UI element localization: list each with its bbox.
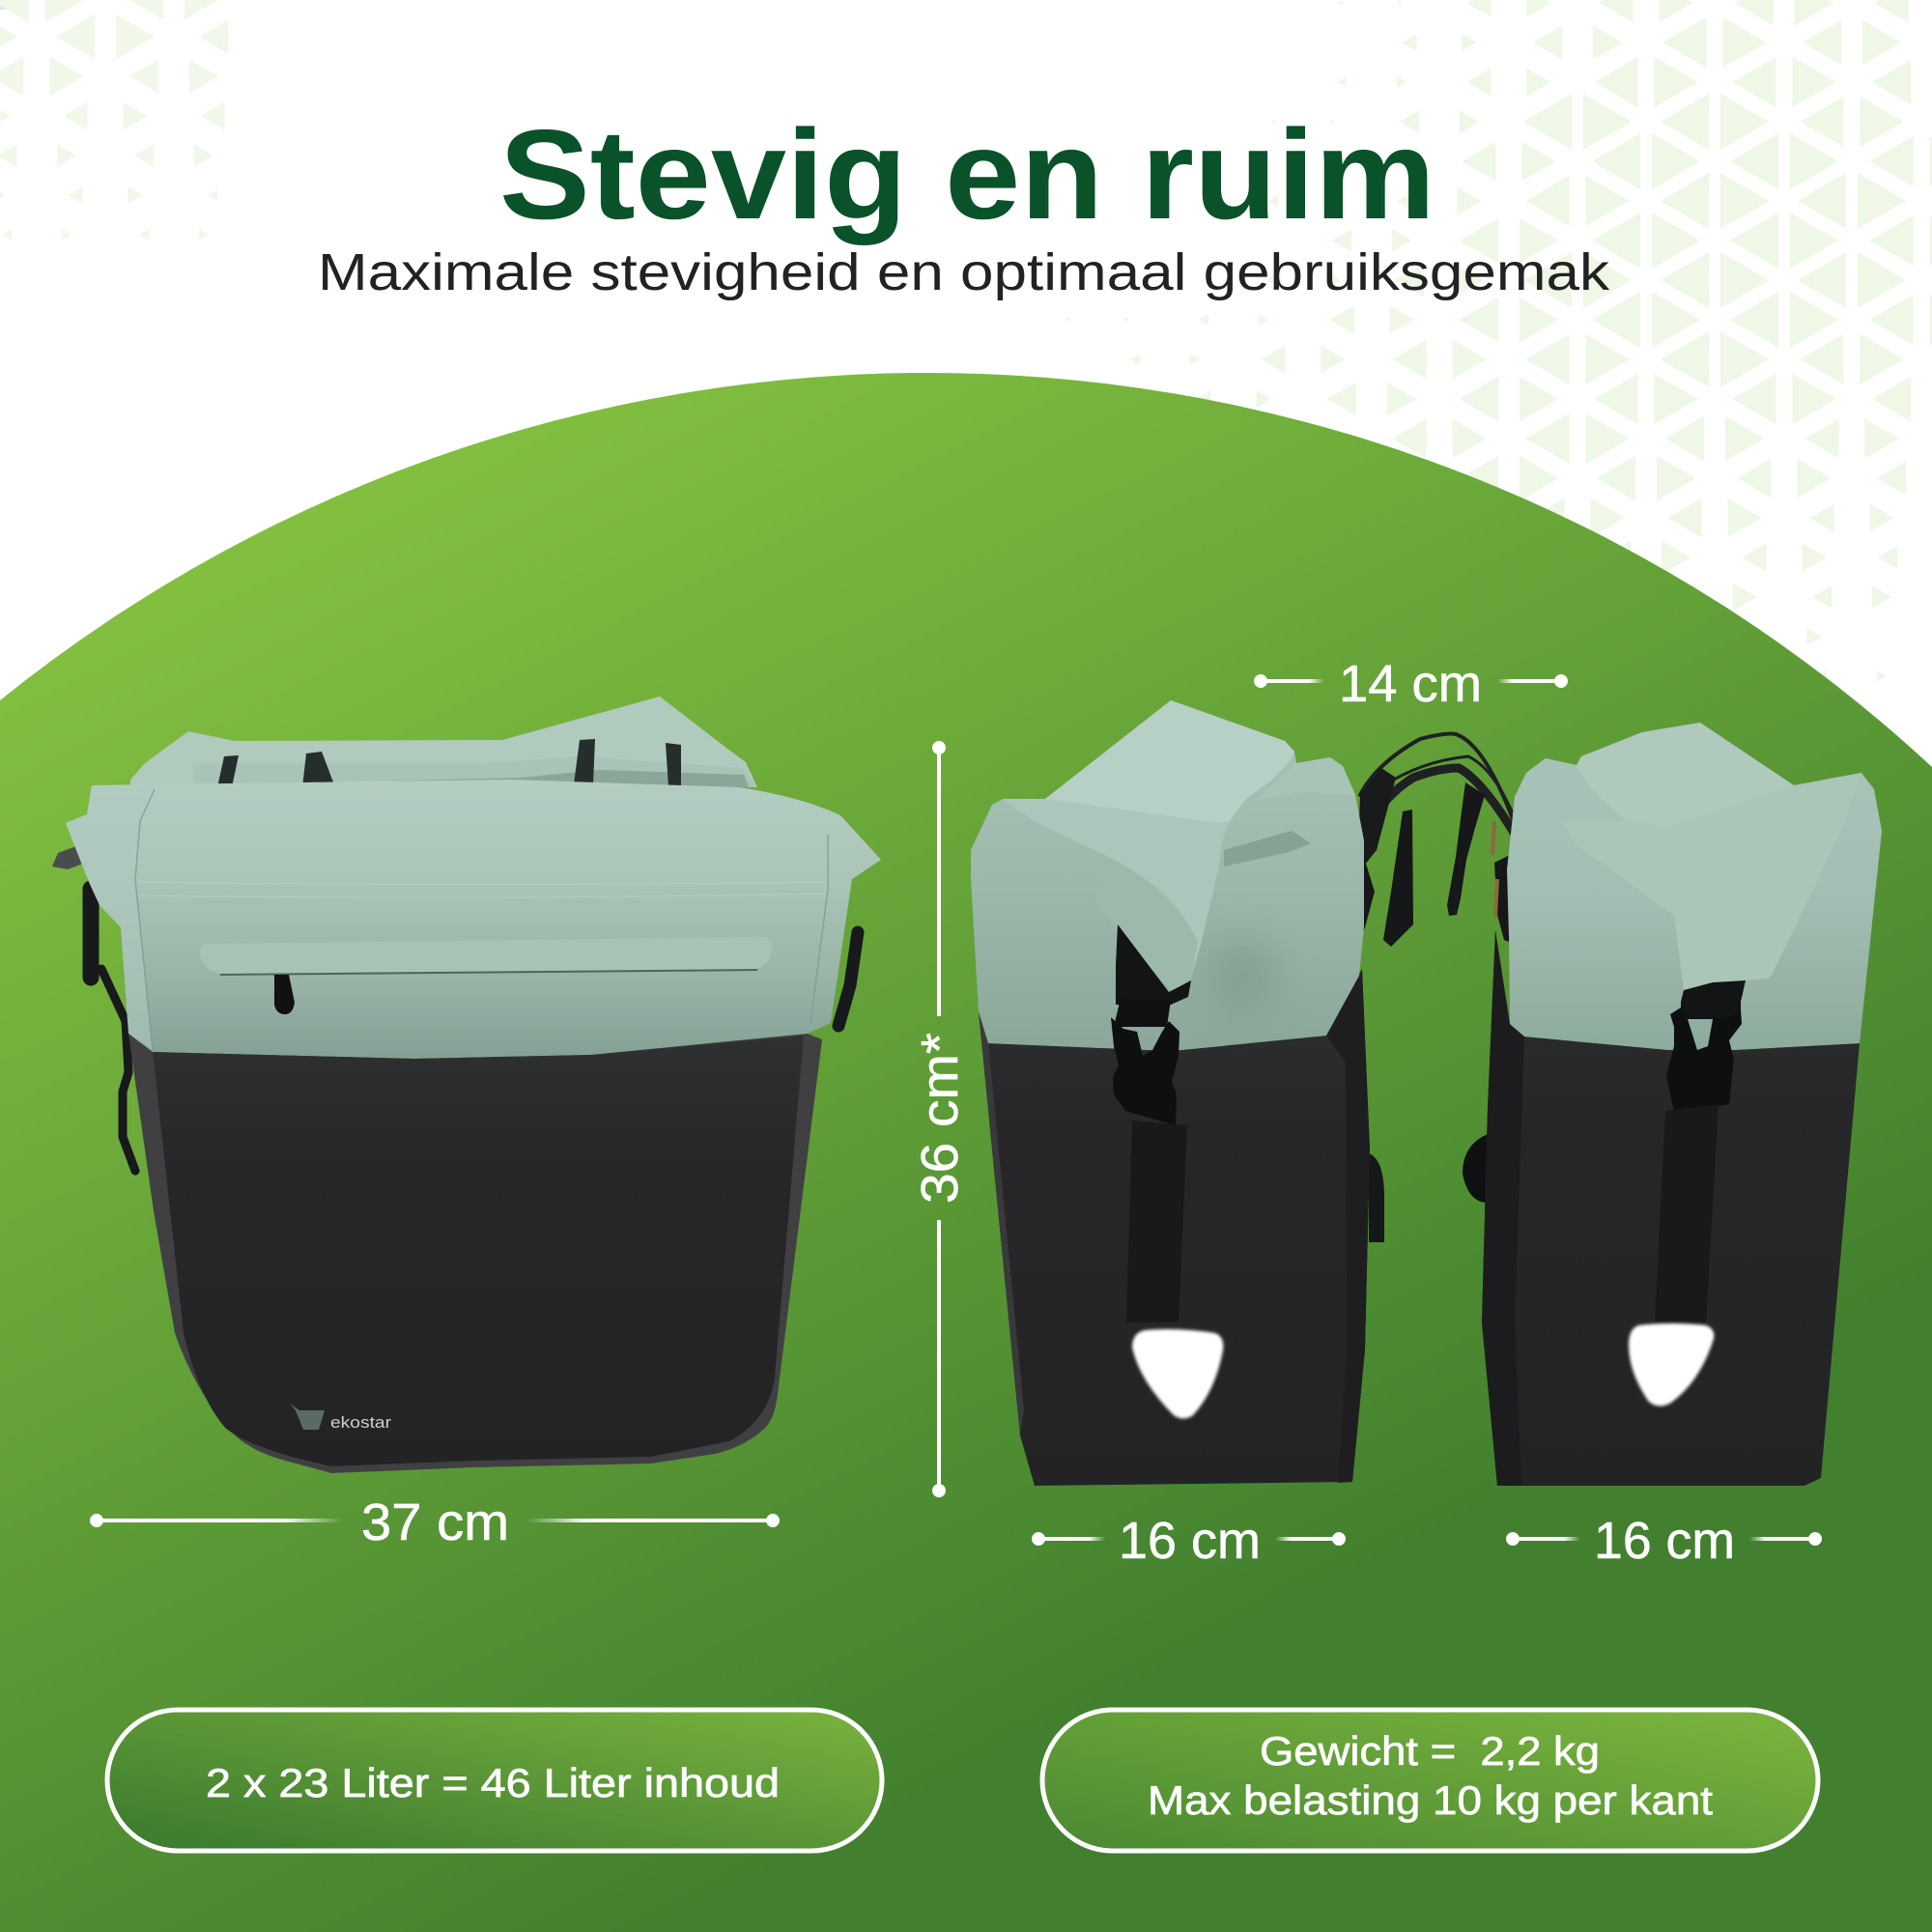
label: 14 cm (1339, 655, 1482, 713)
bag: front view (52, 696, 881, 1473)
reflector (1132, 1329, 1223, 1418)
pill shape (107, 1710, 882, 1851)
strap band (1114, 998, 1171, 1027)
dimension: 16 cm right bag (1506, 1512, 1822, 1570)
label: 36 cm* (911, 1033, 969, 1204)
title: Stevig en ruim (499, 103, 1435, 245)
left roll strip (1515, 758, 1626, 823)
black body (979, 969, 1370, 1486)
pill shape (1042, 1710, 1818, 1851)
black body (1482, 930, 1860, 1486)
line right (1497, 679, 1561, 683)
dimension: 14 cm (1254, 655, 1568, 713)
dots (1506, 1532, 1822, 1546)
left strap and buckle (91, 889, 135, 1171)
zip line (220, 970, 757, 975)
black body (128, 1034, 822, 1473)
dots (932, 741, 946, 1497)
line bottom (937, 1220, 941, 1491)
roll top lobe (1577, 723, 1794, 828)
top roll lower tone (193, 756, 757, 787)
left strip (1482, 930, 1524, 1486)
reflector (1629, 1323, 1714, 1406)
buckle (1111, 1017, 1179, 1125)
lower strap (1655, 1104, 1719, 1322)
carrier straps between side bags (1345, 734, 1523, 1242)
roll front fold (1003, 799, 1230, 992)
pocket flap (200, 937, 772, 974)
pill text: 2 x 23 Liter = 46 Liter inhoud (206, 1760, 780, 1805)
dimension: 36 cm height (911, 741, 969, 1497)
left wing lighter (66, 785, 155, 1050)
lines (1261, 679, 1324, 683)
label: 16 cm (1594, 1512, 1735, 1570)
mint flap (66, 780, 881, 1059)
left hook plate (1345, 836, 1375, 947)
ekostar logo icon (290, 1404, 325, 1430)
band lines (137, 882, 828, 897)
seams (135, 789, 828, 1050)
line right (1275, 1537, 1339, 1541)
left strip (979, 1011, 1024, 1435)
upper strap (1681, 980, 1746, 1019)
left tab (1383, 810, 1413, 947)
right tab (1447, 782, 1485, 916)
right hook plate (1494, 855, 1523, 944)
dimension: 16 cm left bag (1032, 1512, 1346, 1570)
pill: weight (1042, 1710, 1818, 1851)
mint body (1507, 723, 1882, 1050)
back fold strip (1256, 757, 1355, 800)
back fold pocket (1224, 831, 1311, 867)
line right (526, 1519, 773, 1522)
left mesh tab (52, 843, 86, 869)
top roll shadow (335, 770, 749, 787)
label: 37 cm (361, 1493, 509, 1551)
roll top lobe (1045, 700, 1294, 823)
outer loops (1359, 734, 1519, 840)
pill text line 1: Gewicht = 2,2 kg (1260, 1728, 1600, 1774)
body centre tone (153, 1036, 804, 1466)
right buckle (838, 932, 858, 1026)
corner artefact (0, 0, 10, 10)
left mesh (1357, 768, 1396, 874)
body shadow (1212, 941, 1270, 1010)
label: 16 cm (1119, 1512, 1261, 1570)
line right (1749, 1537, 1815, 1541)
bag: right side view (1482, 723, 1882, 1486)
triangle pattern: top right (1065, 0, 1932, 682)
triangle pattern: top left (0, 0, 228, 240)
subtitle: Maximale stevigheid en optimaal gebruiksgemak (318, 243, 1610, 301)
line top (937, 748, 941, 1016)
dots (90, 1514, 780, 1527)
lower strap (1126, 1121, 1187, 1322)
rolled top behind (130, 696, 757, 787)
top straps (217, 739, 681, 787)
line left (1513, 1537, 1580, 1541)
buckle (1666, 1008, 1742, 1113)
bag: left side view (971, 700, 1370, 1486)
fold curl shade (1094, 857, 1198, 992)
dots (1032, 1532, 1346, 1546)
dots (1254, 674, 1568, 688)
dimension: 37 cm (90, 1493, 780, 1551)
line left (97, 1519, 343, 1522)
upper strap (1116, 924, 1191, 1005)
line left (1038, 1537, 1105, 1541)
right strip (1326, 969, 1370, 1483)
left body clip (1369, 1153, 1384, 1242)
mint body (971, 700, 1364, 1051)
zip pull (274, 975, 295, 1014)
ekostar logo text: ekostar (330, 1413, 391, 1432)
roll front fold (1562, 773, 1861, 990)
pill text line 2: Max belasting 10 kg per kant (1148, 1777, 1713, 1823)
brass hooks (1492, 821, 1497, 918)
right body clip (1463, 1134, 1488, 1203)
pill: capacity (107, 1710, 882, 1851)
